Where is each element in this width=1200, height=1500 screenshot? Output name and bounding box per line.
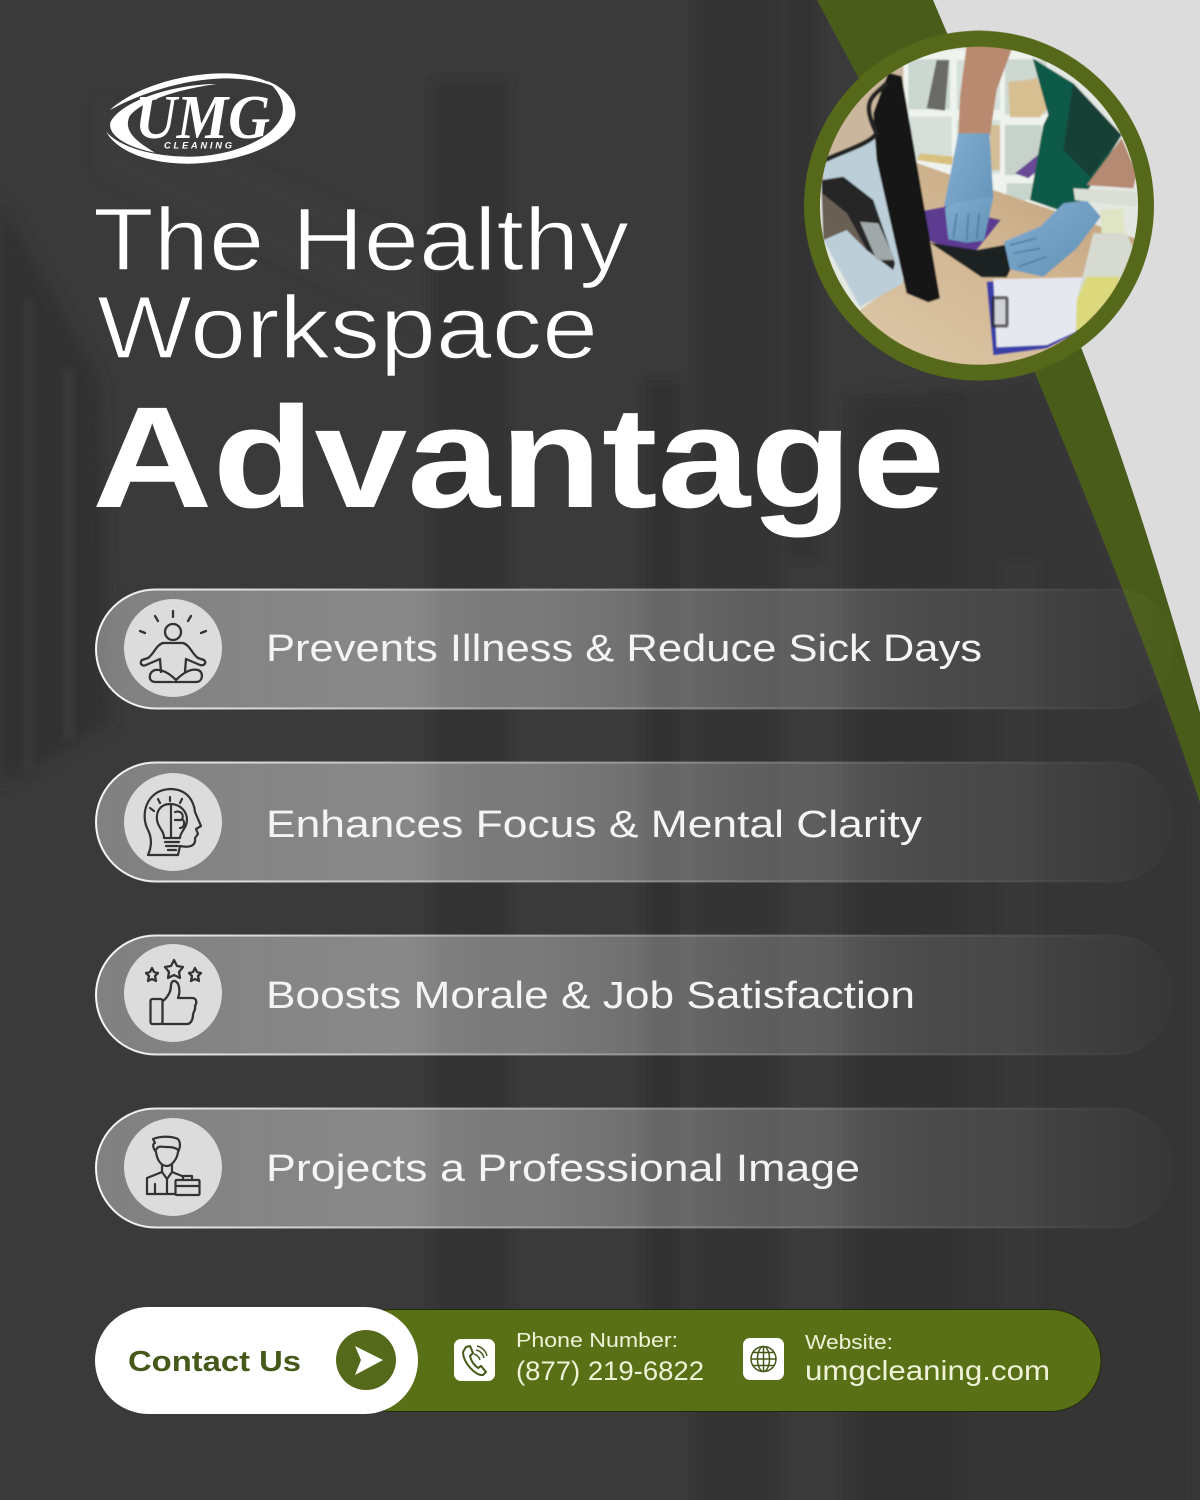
label: Prevents Illness & Reduce Sick Days [266, 628, 982, 670]
phone details: (877) 219-6822 [516, 1356, 704, 1386]
website details: Website: [805, 1332, 893, 1354]
phone details [516, 1330, 704, 1386]
benefit pill 3: boosts morale [96, 936, 1174, 1054]
website details: umgcleaning.com [805, 1355, 1050, 1386]
circular photo: gloved hands cleaning a desk [804, 31, 1154, 381]
contact us button [95, 1307, 418, 1414]
label: Boosts Morale & Job Satisfaction [266, 975, 915, 1017]
website details [805, 1332, 1050, 1386]
logo: UMG Cleaning [106, 73, 295, 164]
logo: UMG Cleaning: CLEANING [164, 140, 232, 150]
contact bar [95, 1307, 1101, 1414]
light grey corner panel [925, 0, 1200, 713]
icon: thumbs up with three stars [124, 944, 222, 1042]
benefit pill 1: prevents illness [96, 590, 1174, 708]
icon: phone [454, 1339, 495, 1381]
logo: UMG Cleaning: UMG [135, 84, 270, 152]
phone details: Phone Number: [516, 1330, 678, 1352]
title: Advantage [92, 377, 945, 538]
icon: professional with briefcase [124, 1118, 222, 1216]
benefit pill 2: enhances focus [96, 762, 1174, 882]
icon: meditating person [124, 599, 222, 697]
label: Enhances Focus & Mental Clarity [266, 804, 922, 846]
label: Projects a Professional Image [266, 1148, 860, 1190]
icon: globe [743, 1338, 784, 1380]
title: The Healthy [93, 189, 630, 289]
green swoosh band [817, 0, 1200, 803]
title: Workspace [97, 277, 598, 377]
contact us button: Contact Us [128, 1346, 301, 1378]
icon: head with lightbulb [124, 773, 222, 871]
title [92, 189, 945, 538]
benefit pill 4: professional image [96, 1108, 1174, 1228]
